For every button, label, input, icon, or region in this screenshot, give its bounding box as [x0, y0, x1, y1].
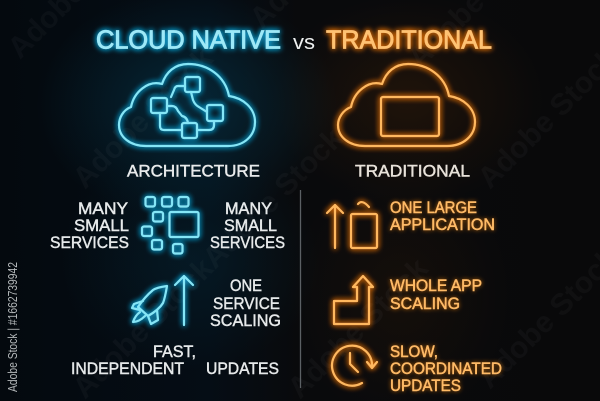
title: traditional: TRADITIONAL — [326, 26, 492, 54]
text: fast independent updates: UPDATES — [206, 360, 279, 378]
icon: single service up arrow — [175, 276, 193, 325]
text: one service scaling: ONE — [230, 277, 262, 295]
label: traditional: TRADITIONAL — [355, 162, 470, 180]
text: slow coordinated updates — [390, 343, 502, 395]
text: many small services left — [50, 200, 129, 252]
text: one large application — [390, 199, 495, 234]
text: many small services left: SERVICES — [50, 234, 129, 252]
icon: clock with arrow — [332, 346, 377, 386]
text: one service scaling: SERVICE — [213, 295, 280, 313]
text: slow coordinated updates: SLOW, — [390, 343, 438, 361]
text: one service scaling — [210, 277, 281, 330]
text: whole app scaling — [390, 277, 482, 313]
stock watermarks: Adobe Stock — [282, 252, 435, 401]
text: many small services left: SMALL — [74, 217, 129, 235]
title: vs: vs — [293, 32, 315, 54]
icon: rocket — [132, 286, 167, 324]
text: one service scaling: SCALING — [210, 312, 281, 330]
text: whole app scaling: SCALING — [390, 295, 460, 313]
text: whole app scaling: WHOLE APP — [390, 277, 482, 295]
text: one large application: APPLICATION — [390, 216, 495, 234]
text: slow coordinated updates: UPDATES — [390, 377, 461, 395]
text: fast independent updates: INDEPENDENT — [71, 360, 184, 378]
text: many small services right: SERVICES — [210, 234, 285, 252]
text: fast independent updates — [71, 343, 279, 378]
text: fast independent updates: FAST, — [153, 343, 196, 361]
text: many small services right — [210, 200, 285, 252]
stock watermarks: Adobe Stock — [67, 42, 220, 195]
text: one large application: ONE LARGE — [390, 199, 477, 217]
text: many small services right: SMALL — [224, 217, 277, 235]
label: architecture: ARCHITECTURE — [127, 162, 260, 180]
icon: cloud native cloud with microservices — [119, 64, 255, 146]
icon: traditional monolith cloud — [338, 64, 475, 146]
stock id caption: Adobe Stock | #1662739942 — [5, 262, 20, 392]
stock watermarks: Adobe Stock — [67, 252, 220, 401]
stock watermarks: Adobe Stock — [197, 122, 350, 275]
icon: whole app scaling — [334, 276, 373, 324]
column divider — [300, 190, 302, 388]
icon: large application with arrow — [327, 202, 377, 248]
title: cloud native: CLOUD NATIVE — [96, 26, 281, 54]
text: many small services right: MANY — [225, 200, 272, 218]
text: slow coordinated updates: COORDINATED — [390, 360, 502, 378]
text: many small services left: MANY — [78, 200, 128, 218]
icon: many small service squares — [142, 197, 198, 254]
